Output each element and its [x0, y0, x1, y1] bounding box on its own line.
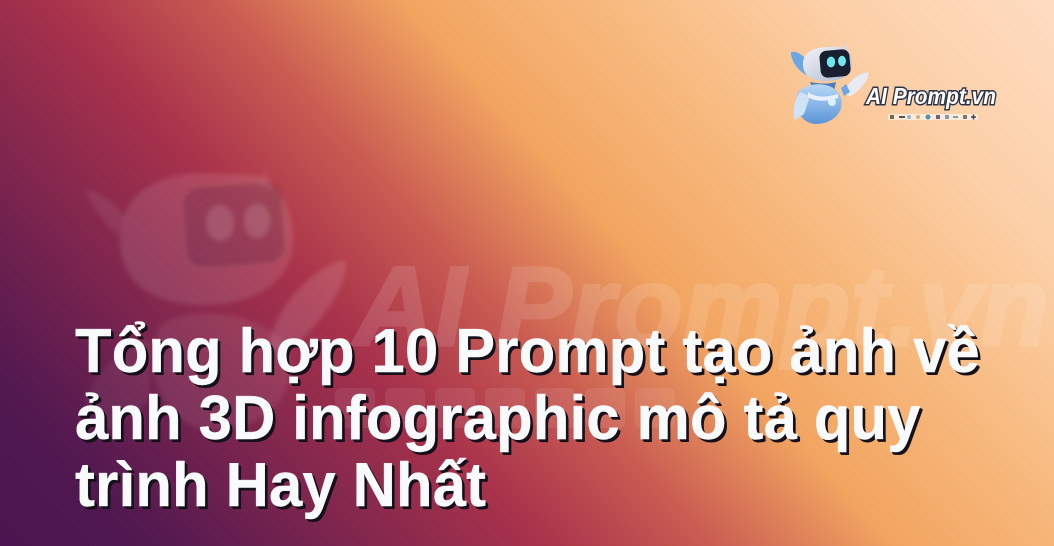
title: trình Hay Nhất [75, 450, 486, 520]
logo icon row [888, 114, 978, 120]
watermark robot [85, 170, 346, 430]
watermark icon row [335, 388, 675, 428]
title [75, 316, 981, 522]
logo robot [791, 42, 868, 124]
title: Tổng hợp 10 Prompt tạo ảnh về [75, 316, 980, 386]
watermark brand text: AI Prompt.vn [351, 244, 1049, 369]
logo wordmark: AI Prompt.vn [865, 83, 996, 109]
title: ảnh 3D infographic mô tả quy [75, 383, 921, 453]
